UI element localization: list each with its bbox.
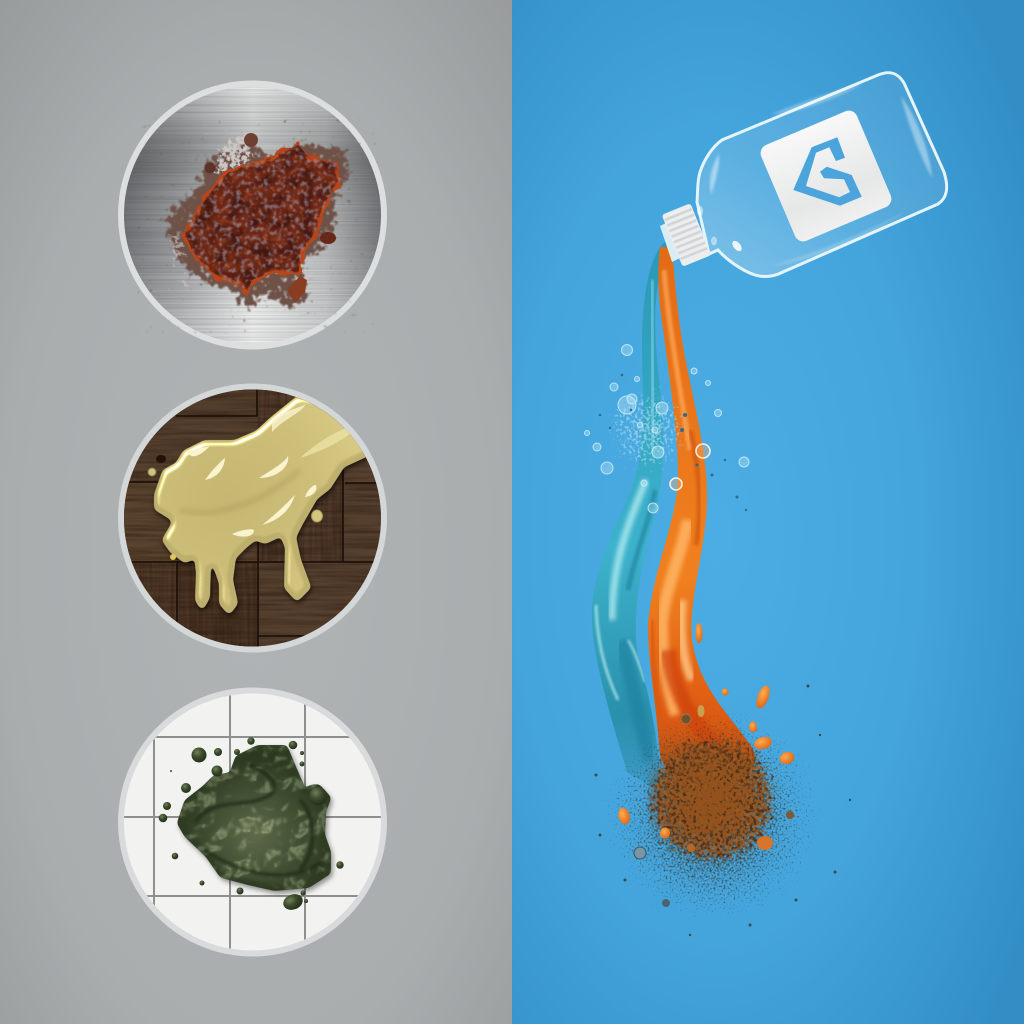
slime blob <box>159 737 344 912</box>
bottle cap <box>662 203 711 267</box>
orange droplets <box>616 623 796 852</box>
right blue panel <box>512 0 1024 1024</box>
rust core <box>185 145 342 290</box>
plank seams <box>120 386 380 652</box>
blue liquid stream <box>592 241 670 792</box>
dirt particle burst <box>575 623 851 950</box>
logo <box>793 137 862 206</box>
pour spout <box>660 222 680 262</box>
fizz bubbles <box>584 344 749 513</box>
panel: green slime on tile <box>118 688 387 956</box>
spill highlights <box>187 404 360 537</box>
orange liquid stream <box>648 247 755 791</box>
left gray panel <box>0 0 512 1024</box>
panel: cream grease spill on wood <box>118 384 387 652</box>
glass highlights <box>697 84 932 266</box>
bottle body <box>697 73 947 276</box>
spill <box>148 399 372 611</box>
bottle <box>660 73 947 276</box>
droplets <box>159 737 344 912</box>
tile grout <box>120 690 386 956</box>
wood knot <box>156 455 166 463</box>
bottle label <box>758 108 894 244</box>
rust fringe <box>165 130 350 310</box>
panel: rust stain on metal <box>118 80 387 350</box>
